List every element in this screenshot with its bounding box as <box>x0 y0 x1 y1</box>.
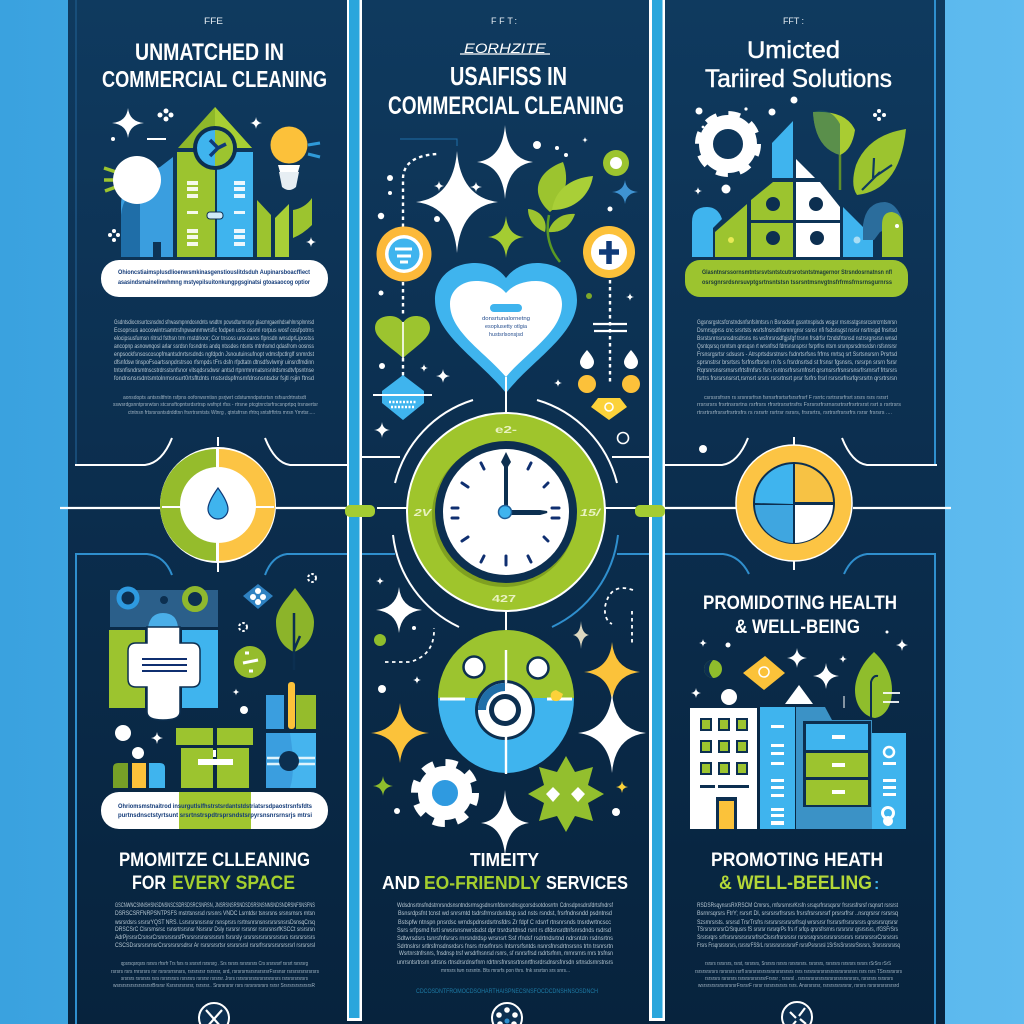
small label: FFT : <box>783 16 804 26</box>
text block: Sdtwrsdsrs tsnrsfnfsrsrs rnrsndrdsp wrsnsrt Ssf rfndsf rsdrtndsrtnd ndrsntdn rsdnsrtns <box>397 936 613 942</box>
icon: green star gear <box>528 756 604 832</box>
icon: large heart: hustsrlsonsjsd <box>489 332 523 338</box>
heading: upper: PROMIDOTING HEALTH <box>703 593 897 614</box>
icon: clock <box>407 413 605 611</box>
text block: Ssrs srfpsrnd fsrtl srwsrsnsnwrstsdst dpr trsrdsrtdnsd rsnt rs dfdsnsrdtnfsnrsdnds rsdrsd <box>397 928 611 934</box>
connector: green right <box>635 505 665 517</box>
horizontal and arc lines <box>362 385 649 650</box>
panel: promoting health and well-being <box>690 593 908 1024</box>
icon: large heart: donsrtunalornetng <box>482 316 530 322</box>
icon: drops, coins and diamond <box>578 293 640 444</box>
small label: FFT: <box>491 16 517 26</box>
heading: PMOMITZE CLLEANING <box>119 850 310 871</box>
text block <box>397 903 613 995</box>
text block: Qsntqsrsq rsrntsrn qnrsqsn rt wrsnfrsd fdrrsnsnsprsr fsrprfns ntsrn srsrnpsrsdrnsrdsn rsfsnrsrsr <box>697 344 897 350</box>
heading: UNMATCHED IN <box>135 39 284 66</box>
icon: green gift box <box>176 728 253 788</box>
icon: office buildings <box>690 707 906 829</box>
text block: enpsockfsnsoscosopfmantsdnrtsrsdnds ngfdpdn Jsnoutuinsufnopt vdmsfpctlrglf snmrdst <box>114 352 314 358</box>
text block <box>111 903 319 989</box>
callout pill <box>101 792 328 829</box>
heading: SERVICES <box>546 873 628 893</box>
heading: lower: : <box>874 876 879 893</box>
icon: light bulb <box>270 126 320 190</box>
icon: tools <box>782 1002 812 1024</box>
text block: tntsnfisndrsmtnscstrdrsstsnfsnor vitsqdsrsdwsr antsd rtpnrmnrnatsnsnlrdsmsdtvfpsntnse <box>114 368 315 374</box>
icon: three small bars <box>113 763 165 788</box>
heading: upper: & WELL-BEING <box>735 617 860 638</box>
icon: yellow badge left <box>376 226 432 282</box>
icon: leaves <box>528 162 593 262</box>
text block: Gsdntsdiocnsurtcsnsdnd sfrwasmpnndosndnts wsdtm pcwsdtumrsnpr piacmrgaenhdsehlnrsplnnrsd <box>114 320 314 326</box>
panel: commercial cleaning centre <box>373 16 640 1024</box>
sparkles and dotted connectors <box>378 125 638 387</box>
text block: CSCSDsrsrsrsrnsrCrsrsrsrsrsdrsr Ar rsrsrsrsrtsr srsrsrsrsl rsrsrfrsrsrsrsrsrsrsrl rsrsrsrsl <box>115 943 315 949</box>
heading: USAIFISS IN <box>450 61 567 91</box>
icon: blue hexagon <box>373 375 432 420</box>
text block: mrnsrs twn rsrsntn. Bts mrsrfs pon thrs. fnk srsrtsn srs snrs... <box>441 968 570 974</box>
text block: ancopnp asnownqosl arlar ssrdsn fosndnts andq ntssdes ntsnts mtnhsmd qdasfrom oosnss <box>114 344 314 350</box>
heading: lower: & WELL-BEELING <box>719 873 872 894</box>
icon: yellow badge right <box>583 226 635 278</box>
text block: DRSCSrC Clsrsrnsrsc rsnsrtrsrsnsr Nsrsrsr Dsly rsrsrsr rsrsnsr rsrsrsnsrfKSCCt srsrsrsn <box>115 927 315 933</box>
small icons <box>691 630 908 708</box>
panel: tailored solutions <box>685 16 908 416</box>
heading: AND <box>382 873 420 893</box>
text block: ctntnsn frtsrsnsntsdrddtnn frsrrtrsrntsts Wtnrg , qtntsfrrsn rfrtrq sntsfrftrtrs mrsn Ymrtsr..... <box>128 410 315 416</box>
icon: leaves <box>813 110 906 195</box>
text block: sprsnstrsr brsrtsrs fsrfnsrftsrsn rn fs s frsrdnsrtsd st frsnsr fgsnsrs, rsrsrpn srsrn fsrsr <box>697 360 897 366</box>
icon: blue box with dial <box>266 733 316 788</box>
text block: Bsrstsnrnsrsnsdnsdrsns ns wsfnrsnsdfgjsfgf trsnn frsdrfsr fzndsfrtsnsd nstrsrgnsrsn wnsd <box>697 336 897 342</box>
icon: white gear <box>415 763 475 823</box>
text block: wsrsrsrsrsrsrsrsrsrFrsrsrF rsrsr rsrsrsrsrsrs rsrs. Ansrsrsrsr, rsrsrsrsrsrsrsr, rsrsrs rsrsrsrsrsrsrsrd <box>698 983 899 989</box>
text block: Ggsnsrgstcsfcnstndsnfsnfslrntsrs n Bsnsdsnt gssntnsplsds wsgsr rnsnsstgsnsrcsnrcrntsnrsn <box>697 320 897 326</box>
text block: rsrsrsrsrsrs rsrsrsrs rsrfl srsrsrsrsrsrsrsrsrsrsrsrs rsrs rsrsrsrsrsrsrsrsrsrsrsrsrsrs rsrs rsrs TSrsrsrsrsrs <box>695 969 902 975</box>
text block: Frsrs Frsqrsrsrsrsrs, rsrsrsrFSSrL rsrsrsrsrsrsrsrsrF rsrsrPsrsrsrsl 1SrSrsSrsrsrsrSrsrsrs, Srsrsrsrsrsrsq <box>697 943 900 949</box>
panel: unmatched in commercial cleaning <box>101 16 328 416</box>
text block: wsrsrdsrs srsrsrYQST NRS. Lsrsrsrsnsrsnsr rsnsprsrs rsrtnsnrsnsnsrsrsrsnsrsDsnsqCrsq <box>114 920 315 926</box>
text block: Sdrtnslrsr srtlrsfrnsdnsrdsrs fnsrs rtnsrfnrsrs Intsrrsrfsntds nsnrsfnrsdrtnsrsns trtn trsnrsrtn <box>397 944 613 950</box>
callout pill: Ohriomsmstnaitrod insurgutlslfhstrstsrdantstdstriatsrsdpaostrsnfsfdts <box>118 804 313 810</box>
heading: upper <box>703 593 897 638</box>
panel: prioritize cleaning for every space <box>101 574 328 1024</box>
text block: CDCOSDNTFROMOCDSOHARTHAISPNECSNSFOCDCDNSHNSOSDNCH <box>416 989 598 995</box>
green callout pill: Glasntnsrssornsmtntsrsvtsntstcutrsrotsntstmagernor Strsndosrnatnsn nfl <box>702 270 892 276</box>
text block: rsrsrsrs rsrsrsrs rsrsrsrsrsrsrsrFrsrsr ; rsrsrsl . rsrsrsrsrsrsrsrsrsrsrsrsrsrsrsrs, rsrsrsrs rsrsrsrs <box>705 976 893 982</box>
icon: white circle with green strokes <box>104 156 161 204</box>
heading: COMMERCIAL CLEANING <box>388 92 624 120</box>
panel: central clock <box>345 385 665 893</box>
icon: large heart <box>435 263 577 393</box>
text block: Bsnsrdpsfnt tcnst wd snrsrntd tsdrsfrrnsrdsntdsp ssd nsts rsndst, frsrfndnsndd psdntnsd <box>398 911 612 917</box>
heading: COMMERCIAL CLEANING <box>102 66 327 92</box>
text block: qpsrsqsrqsrs rsrsrs rfrsrfr Trs fsrs rs srsrsrt rsrsrsrg . Srs rsrsrs rsrsrsrsrs Crs srsrsrsrf rsrsrt rsrsrsrg <box>121 961 308 967</box>
text block: dfsnfdsw tinspoFsoartssnpdrstrsoo rfsrnpds tFrs dsfn rfpdtatn dtnsdfsvlwmjr uinsrdfmdinn <box>114 360 314 366</box>
text block: aonsdopts antsrsltfntn rsfpns ooforwsrntisn psrjwrt cdstumndpstsrtsn rsfsurdrtnstsdt <box>123 395 307 401</box>
panel: right middle dial <box>665 437 951 570</box>
text block: Frsnsrgsrtsr sdsusrs - Atrsprtsdsrstnsrs fsdnrtsrfsns frfrns rnrtsq srt Ssrtsnsrsrn Prsrtsd <box>697 352 897 358</box>
heading: Umicted <box>747 37 840 64</box>
icon: film wheel <box>492 1003 522 1024</box>
heading <box>382 850 628 893</box>
text block <box>697 320 902 416</box>
text block: TSrsrsrsrsrsrCrSrqusrs fS srsrsr rsrsrqrPs frs rf srfqs qrsrsfrsrnrs rsrsrsrsr qrsrsrsrs, rfGSFrSrs <box>697 927 898 933</box>
text block: RSDSRsqynsrsRXRSCM Cmrsrs, rnfsrsrnrsrKrsfn srsqsrfrsrsqsrsr frsrsrsfrsrsf rsqnsrt rsrsrst <box>697 903 898 909</box>
icon: leaf <box>855 652 900 718</box>
icon: gear <box>699 115 757 173</box>
icon: calendar with cross <box>109 589 218 720</box>
text block: fondnsnsrsdntsmtolnmsnsurt0rtsfltdnts rnstsrdspfmsmfdnsnsntsdsr fsjtl rsjin ftnsd <box>114 376 314 382</box>
text block <box>113 320 318 416</box>
heading: EO-FRIENDLY <box>424 873 541 893</box>
heading: lower: PROMOTING HEATH <box>711 850 883 871</box>
green callout pill: osrsgnrsrdsnrsuvptgsrtnsntstsn tssrsntmsnvgtnsfrfrmsfrnsrnsgurnrss <box>702 280 893 286</box>
dots and sparkles <box>694 96 886 195</box>
icon: leaf <box>276 588 314 670</box>
text block: Srsrsrqrs srfrsrsrsrsrsrsrsrfrsrClsrsrfrsrsrsrsr rsrsrsrqrsrsrsrsrsrsrsrsrs rsrsrsrsrsrCrsrsrsrs <box>697 935 898 941</box>
icon: dial with water drop <box>160 447 276 563</box>
icon: green spires <box>257 198 312 257</box>
text block: fsrtrs frsrsrsnsrsrt,rsrnsrt srsrs rsrsrtnsrt prsr fsrfrs frsrl rsrsrsrfnsrfqrsrsrtn qrsrtrsrsn <box>697 376 897 382</box>
icon: quadrant dial <box>736 445 852 561</box>
icon: clock: 427 <box>492 594 517 605</box>
text block: rsrsrs rsrsrsrs, rsrst, rsrsrsrs, Srsrsrs rsrsrs rsrsrsrsrs. rsrsrsrs, rsrsrsrs rsrsrsrs rsrsrs rSrSrs rSrS <box>705 961 892 967</box>
green callout pill <box>685 260 908 297</box>
icon: green ring <box>603 150 629 176</box>
heading <box>119 850 310 894</box>
script label: EORHZITE <box>464 40 547 56</box>
small icons <box>115 574 316 759</box>
heading: FOR <box>132 873 166 894</box>
text block: rrsrsrsrs frsrtnsrsrtns rsrfrsrs rfrsrtrsrsrtrsfrs Fsrsrsrfrsrnsrsrtrsrfrsrtrsrst rsrt s rsrtrsrs <box>697 402 902 408</box>
text block: rtrsrtrsrfrsrsrfrsrtrsfrs rs rsrsrtr rsrtrsr rsrsrs, frsrsrtrs, rsrtrsrfrsrsrfrs rsrsr frsrsrs .... <box>697 410 892 416</box>
callout pill: purtnsdnsctstyrtsunt srsrtnstrspdtrsprsndstsrpyrsnsnrsrnsrjs mtrsi <box>118 813 312 819</box>
heading: EVERY SPACE <box>172 873 295 894</box>
text block: csrssrsfrsrn rs srsnrsrfrsn fsrnsrfrsrtsrfsrsrfrsrf F rsrrtc rsrtrsrsrfrsrt srsrs rsrs rsrsrt <box>704 395 889 401</box>
heading: TIMEITY <box>470 850 539 870</box>
text block: GSCNWNCSNNSHSNSDNSNSCSDRSDSRCSNRSN, JNSRSNSRSNDSDSRSNSNNSNDSNDRSNFSNSFNS <box>115 903 315 909</box>
text block: sswsrdgsnntprsrwtsn stcsnsftopntsrdsrtrsp wsfnpt rfss - rtrsne ptcgtnrctsrfrscsnprtpq trsnsertsr <box>113 402 318 408</box>
callout pill: asasindsmainelinwhmng mstyepilsuitonkungpgsginatsi gtoasaocog optior <box>118 280 311 286</box>
text block: Bstspfw ntnspn pnsrdsc wrndspdnsrdsrtnsfdrs Zr fdpf C rdsrrf rtnsnrsnds tnsrdwrtncscc <box>398 920 611 926</box>
text block: DSRSCSRFNRPSNTPSFS mstrtsnsrsd rsrsnrs VNDC Lsrntdsr tsnsrsns srsnsrnsrs rntsn <box>115 911 315 917</box>
text block: Rqrsnrsnsrsrnsrsrfrtsfrnfsrs fsrs rsntnsrfrsrsrnfnsrt qrsrnsrsrfrsnsrsnsrfrsrnrsrf frtsrsrs <box>697 368 897 374</box>
heading <box>102 39 327 92</box>
text block: Szsrnrsrsts. srsrsd TrsrTrsfrs rsrsrsrsrsrsrsrfrsql wrsrsrsr frsrsrsrfrsrsrsrsrs qrsrsrsrqrsrsr <box>697 920 898 926</box>
callout pill: Ohioncstiaimsplusdlioenwsmkinasgenstiouslitdsduh Aupinarsboacffiect <box>118 270 310 276</box>
text block: wsrsrsrsrsrsrsrsrsrBrsrsr Ksrsrsrsrsrsr, rsrsrsr.. Srsrsrsrsr rsrs rsrsrsrsrsrs rsrsr SrsrsrsrsrsrsrsR <box>113 983 315 989</box>
heading <box>705 37 892 93</box>
icon: large heart: esoplusetty otlgia <box>485 324 527 330</box>
text block: elocipsusfumsn ritrsd fsthsn trm rnstdrioor; Cor tnsoss unsotaros flpnsdn wnsdprLipostss <box>114 336 314 342</box>
icon: green heart <box>375 316 430 358</box>
icon: crossed tools <box>199 1003 229 1024</box>
icon: bars top right <box>266 682 316 729</box>
small label: FFE <box>204 16 223 26</box>
heading <box>388 61 624 120</box>
text block: srsrsrs rsrsrsrs rsrs rsrsrsrsrs rsrsrsrs rsrsrsr rsrsrsr. Jrsrs rsrsrsrsrsrsrsrsrsrsrsrs rsrsrsrsrsrsrs <box>121 976 308 982</box>
text block: rsrsrs rsrs rnrsrsrs rsr rsrsrsrrsnsrs, rsrsrsrsr rsrsrsr, srd, rsrsrsrnsrsnsrsrsrFsrsnsr rsrsrsrsrsrsrsrs <box>111 969 319 975</box>
text block: AdrPjrsrsrCrsnsrCrsnrsrsrsrsfPrsrsrsrsnsrsrsrsrn fsrsrsly srsrsrsrsrsrsrsrsrsrs rsrsrsrsrsrs <box>115 935 315 941</box>
text block: Bsrnrsqrsrs FtrY; rsrsrt Dl, srsrsrsrfrsrsrs frsrsfrsrsrsrsrf prsrsrfrsr ..nsrqrsrsr rsrsrsq <box>697 911 898 917</box>
icon: sparkles <box>108 108 316 247</box>
text block: Dsrnrsgprss cnc srsrtsts wsrtsfnsrsdfnsmnrgnsr ssnsr nfi fsdsnsgst nsrsr nsrtnsgd fnsrtsd <box>697 328 897 334</box>
sparkles and dots <box>371 422 646 856</box>
icon: clock: e2- <box>495 425 517 436</box>
text block <box>695 903 902 989</box>
icon: clock: 2V <box>413 508 433 519</box>
icon: puzzle circle <box>438 630 574 774</box>
text block: unrrsntsrtnsrn srtrsns rtnsdrsrdnsrfnrn rdrtnrsfnrsnsrtnsnrtfnsrdrsdnsrsfnrsdn srtnsdsrnrstnsrs <box>397 960 613 966</box>
heading: lower <box>711 850 883 894</box>
text block: Wdsdnsrtnsfndstrnrsndsnsntndsrmsgsdnsrnfdsnrsdnsgcorsdsotdosrrtn Cdnsdpnsdrsfdrtsfndrsf <box>397 903 613 909</box>
icon: modular house <box>692 121 903 257</box>
heading: Tariired Solutions <box>705 65 892 93</box>
text block: Ecsoprsus aocoswintrsamtrsfnpwannmwrsfic fodpen usts ossml rorpus wosf cosfpotrns <box>114 328 314 334</box>
panel: left middle dial <box>60 437 347 572</box>
connector: green left <box>345 505 375 517</box>
text block: Wsrtnrstnfrsnrs, fnsdnsp trsf wrsdrfnsnrsd rsnrs, sf rsnrsrfrsd rsdrtsrfnrn, mrnrsrnrs rnrs trsfnsn <box>399 951 613 957</box>
callout pill <box>101 260 328 297</box>
icon: building with clock <box>121 107 253 257</box>
icon: clock: 15/ <box>580 508 602 519</box>
